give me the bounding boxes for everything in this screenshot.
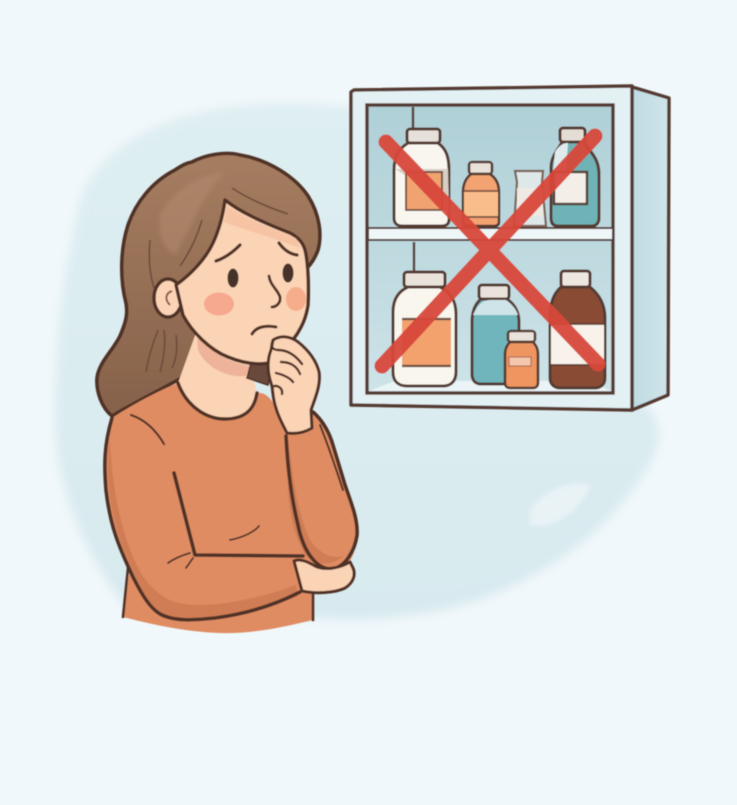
bottle: bottom shelf brown	[550, 271, 605, 388]
medicine cabinet	[351, 86, 669, 410]
red X crossing out the medicines	[382, 136, 598, 366]
neck shadow	[197, 332, 250, 376]
cheek right	[286, 287, 306, 311]
fringe strand lines	[146, 188, 288, 372]
ear	[154, 279, 182, 317]
sweater body	[105, 383, 357, 633]
bottle: bottom shelf teal	[472, 285, 519, 384]
interior back lines	[413, 107, 414, 272]
finger lines	[272, 341, 302, 394]
mouth	[252, 326, 276, 334]
bottom shelf surface	[369, 381, 611, 391]
bottle: bottom shelf small orange	[505, 331, 538, 388]
collar shadow block	[247, 361, 273, 385]
raised hand	[268, 337, 319, 433]
cabinet front frame	[351, 86, 632, 410]
bottle: top shelf small orange	[463, 162, 499, 226]
eyebrows	[216, 243, 297, 261]
faint highlight in wash	[530, 484, 590, 526]
bottle: top shelf large white	[394, 129, 449, 226]
neck	[178, 330, 262, 418]
hair back	[97, 153, 320, 416]
cabinet side panel	[632, 87, 669, 410]
lower hand	[294, 560, 354, 593]
hair highlight	[159, 172, 225, 255]
woman	[97, 153, 357, 633]
sweater shading	[108, 440, 298, 620]
nose	[269, 276, 280, 307]
sweater outlines	[105, 383, 357, 620]
bottle: top shelf teal	[551, 128, 599, 226]
face	[176, 200, 308, 364]
background wash blob	[55, 103, 659, 620]
eyes	[228, 268, 238, 288]
fringe shadow	[224, 206, 300, 248]
bottle: bottom shelf large white	[393, 272, 456, 386]
sleeve shading	[288, 436, 345, 564]
cheek left	[204, 292, 234, 316]
bottle: top shelf small clear	[514, 171, 546, 226]
cabinet interior	[367, 105, 613, 393]
middle shelf	[368, 228, 613, 240]
